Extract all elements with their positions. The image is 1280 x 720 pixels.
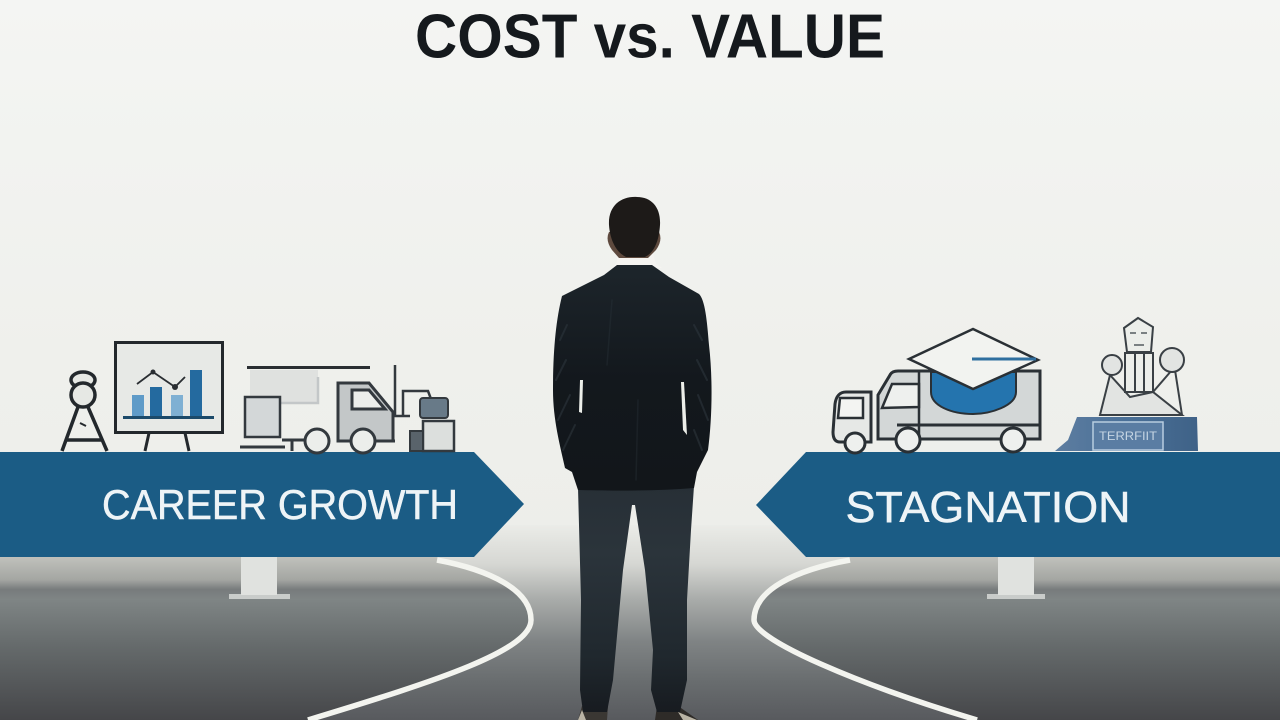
title: COST vs. VALUE — [415, 2, 885, 72]
ears and head — [608, 232, 660, 258]
hair — [609, 197, 660, 257]
right road line — [754, 560, 977, 720]
left ground area — [0, 557, 531, 720]
neck and collar — [612, 250, 662, 268]
icon: presentation board with chart — [116, 342, 222, 451]
icon: delivery truck, left — [240, 366, 395, 453]
icon: forklift and boxes — [395, 365, 454, 451]
jacket highlights — [556, 300, 708, 480]
left road line — [308, 560, 531, 720]
trousers — [578, 486, 694, 712]
label: career growth: CAREER GROWTH — [102, 481, 458, 528]
icon: statue on plinth: TERRFIIT — [1099, 429, 1158, 443]
right ground area — [754, 557, 1280, 720]
label: stagnation: STAGNATION — [846, 483, 1130, 532]
icon: person figure — [62, 372, 107, 451]
road surface — [0, 525, 1280, 720]
jacket — [553, 265, 712, 491]
shoes — [578, 706, 698, 720]
right arrow banner: stagnation — [756, 452, 1280, 557]
left arrow banner: career growth — [0, 452, 524, 557]
person from behind — [553, 197, 712, 720]
right sign post — [987, 557, 1045, 599]
icon: statue on plinth — [1055, 318, 1198, 451]
left sign post — [229, 557, 290, 599]
icon: truck with graduation cap — [833, 329, 1040, 453]
arm gaps — [579, 380, 687, 435]
